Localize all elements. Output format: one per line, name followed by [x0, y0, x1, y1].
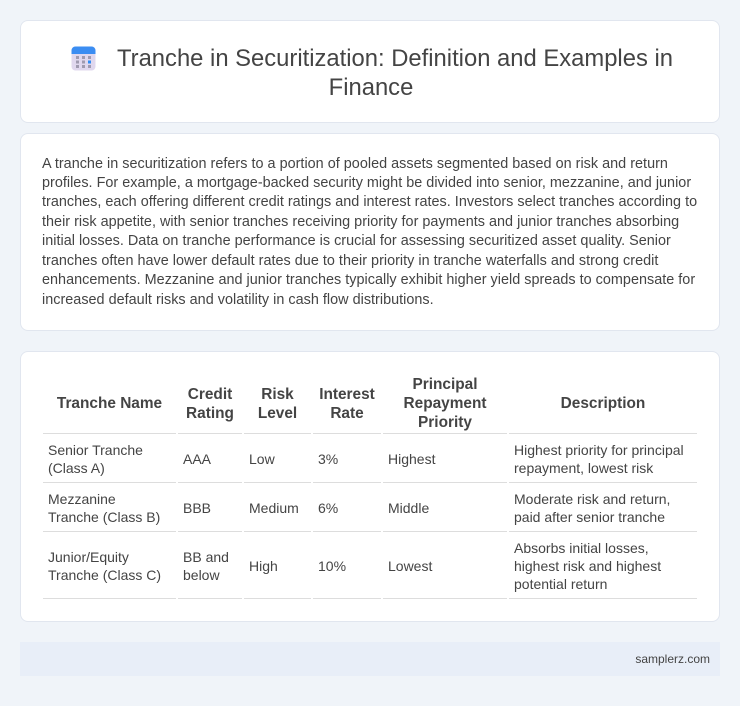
table: tranche comparison: paid after senior tranche	[514, 509, 665, 525]
heading: title: Finance	[329, 74, 413, 101]
table: tranche comparison: 6%	[318, 500, 338, 516]
text block: definition: tranches, each offering different credit ratings and interest rates. Investors select tranches according to	[42, 194, 697, 210]
text block: definition: tranches often have lower default rates due to their priority in tranche waterfalls and strong credit	[42, 253, 658, 269]
text block: definition: A tranche in securitization refers to a portion of pooled assets segmented based on risk and return	[42, 156, 668, 172]
table: tranche comparison: Senior Tranche	[48, 442, 143, 458]
table: tranche comparison: Repayment	[404, 395, 486, 412]
table: tranche comparison: below	[183, 567, 220, 583]
table: tranche comparison: Low	[249, 451, 275, 467]
table: tranche comparison: Level	[258, 404, 297, 422]
table: tranche comparison: BB and	[183, 549, 229, 565]
panel: table card	[20, 351, 720, 622]
text block: definition: enhancements. Mezzanine and junior tranches typically exhibit higher yield spreads to compensate for	[42, 272, 695, 288]
heading: title	[117, 45, 673, 101]
table: tranche comparison: 3%	[318, 451, 338, 467]
footer: source	[20, 642, 720, 676]
table: tranche comparison: Lowest	[388, 558, 432, 574]
table: tranche comparison: Rate	[330, 404, 364, 422]
heading: title: Tranche in Securitization: Definition and Examples in	[117, 45, 673, 72]
table: tranche comparison: Priority	[418, 414, 472, 431]
table: tranche comparison: AAA	[183, 451, 211, 467]
table: tranche comparison: Credit	[188, 386, 232, 402]
table: tranche comparison: highest risk and highest	[514, 558, 661, 574]
table: tranche comparison: Interest	[319, 386, 375, 402]
table: tranche comparison: Highest priority for principal	[514, 442, 684, 458]
icon: calendar	[72, 46, 96, 70]
table: tranche comparison: repayment, lowest risk	[514, 460, 653, 476]
panel: definition paragraph card	[20, 133, 720, 331]
text block: definition: profiles. For example, a mortgage-backed security might be divided into senior, mezzanine, and junior	[42, 175, 691, 191]
text block: definition	[42, 156, 697, 308]
table: tranche comparison: Tranche Name	[57, 395, 162, 412]
table: tranche comparison	[43, 376, 697, 599]
text block: definition: initial losses. Data on tranche performance is crucial for assessing securitized asset quality. Senior	[42, 233, 671, 249]
table: tranche comparison: Absorbs initial losses,	[514, 540, 649, 556]
table: tranche comparison: Moderate risk and return,	[514, 491, 670, 507]
table: tranche comparison: Principal	[412, 376, 478, 393]
text block: definition: their risk appetite, with senior tranches receiving priority for payments and junior tranches absorbing	[42, 214, 679, 230]
panel: title header	[20, 20, 720, 123]
table: tranche comparison: Middle	[388, 500, 429, 516]
table: tranche comparison: Description	[561, 395, 645, 412]
footer: source: samplerz.com	[635, 652, 710, 666]
table: tranche comparison: Highest	[388, 451, 435, 467]
table: tranche comparison: (Class A)	[48, 460, 105, 476]
table: tranche comparison: Mezzanine	[48, 491, 116, 507]
table: tranche comparison: High	[249, 558, 278, 574]
table: tranche comparison: Medium	[249, 500, 299, 516]
table: tranche comparison: potential return	[514, 576, 607, 592]
text block: definition: increased default risks and volatility in cash flow distributions.	[42, 292, 434, 308]
table: tranche comparison: Tranche (Class B)	[48, 509, 160, 525]
table: tranche comparison: Risk	[261, 386, 294, 402]
table: tranche comparison: BBB	[183, 500, 211, 516]
table: tranche comparison: Junior/Equity	[48, 549, 129, 565]
table: tranche comparison: Rating	[186, 404, 234, 422]
table: tranche comparison: 10%	[318, 558, 346, 574]
table: tranche comparison: Tranche (Class C)	[48, 567, 161, 583]
